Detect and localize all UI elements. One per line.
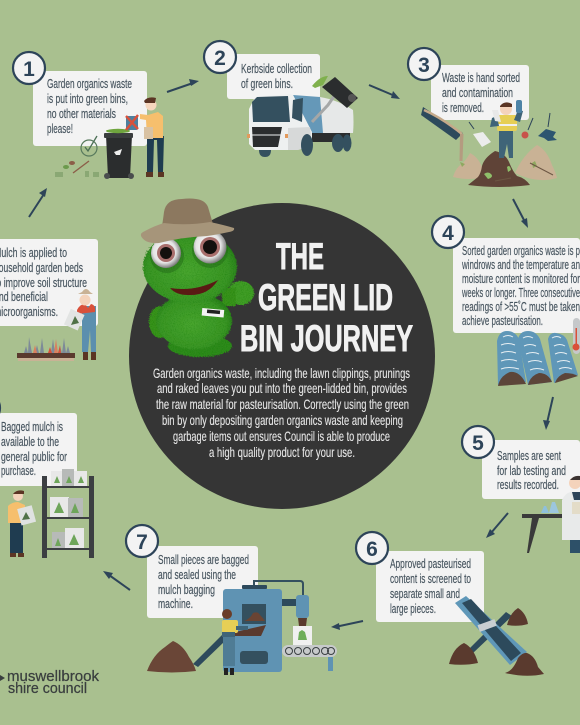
mascot: green character with hat: [141, 198, 254, 357]
panel: step 2: 2: [214, 47, 226, 70]
panel: step 7: 7: [136, 531, 148, 554]
panel: step 4: 4: [442, 222, 454, 245]
panel: step 8: purchase.: [1, 463, 36, 478]
panel: step 6: [356, 532, 544, 676]
panel: step 3: [408, 48, 557, 187]
panel: step 5: [462, 426, 580, 553]
panel: step 6: 6: [366, 538, 378, 561]
panel: step 2: Kerbside collection: [241, 61, 312, 76]
title: GREEN LID: [258, 277, 393, 318]
panel: step 1: 1: [23, 58, 35, 81]
panel: step 7: [126, 525, 337, 675]
icon: garden bed: [17, 337, 75, 361]
panel: step 8: [0, 392, 94, 558]
intro paragraph: a high quality product for your use.: [209, 445, 355, 460]
panel: step 8: general public for: [1, 449, 67, 464]
icon: thermometer: [572, 318, 580, 354]
panel: step 1: please!: [47, 121, 73, 136]
panel: step 7: and sealed using the: [158, 567, 236, 582]
panel: step 7: machine.: [158, 596, 193, 611]
icon: person holding bag: [8, 490, 36, 557]
logo: muswellbrook shire council: [0, 668, 99, 697]
icon: contaminants removed: [469, 113, 557, 147]
panel: step 6: content is screened to: [390, 571, 471, 586]
arrow: [331, 621, 363, 630]
arrow: [543, 397, 553, 430]
panel: step 3: is removed.: [442, 100, 484, 115]
arrow: [167, 79, 199, 92]
icon: piles of screened material: [449, 608, 544, 676]
icon: scientist: [562, 476, 580, 553]
intro paragraph: Garden organics waste, including the lawn clippings, prunings: [153, 366, 410, 381]
logo: muswellbrook shire council: shire council: [8, 680, 87, 697]
central dark circle: [129, 203, 435, 509]
intro paragraph: bin by only depositing garden organics waste and keeping: [162, 413, 403, 428]
icon: compost piles: [453, 145, 557, 187]
title: BIN JOURNEY: [240, 318, 413, 359]
panel: step 6: Approved pasteurised: [390, 556, 471, 571]
intro paragraph: the raw material for pasteurisation. Correctly using the green: [156, 397, 409, 412]
icon: mulch pile and feed conveyor: [147, 635, 225, 672]
icon: lab table and flasks: [522, 502, 580, 553]
title: THE: [276, 236, 324, 277]
panel: step 1: Garden organics waste: [47, 76, 132, 91]
icon: collection truck: [247, 76, 358, 157]
panel: step 3: 3: [418, 54, 430, 77]
panel: step 7: mulch bagging: [158, 582, 215, 597]
logo: muswellbrook shire council: muswellbrook: [7, 668, 99, 685]
icon: farmer with mulch bag: [64, 289, 96, 360]
arrow: [513, 199, 528, 228]
arrow: [369, 85, 400, 99]
panel: step 8: Bagged mulch is: [1, 419, 63, 434]
icon: check mark: [81, 136, 97, 156]
panel: step 7: Small pieces are bagged: [158, 552, 249, 567]
panel: step 8: available to the: [1, 434, 59, 449]
panel: step 9: [0, 239, 98, 361]
panel: step 5: 5: [472, 432, 484, 455]
icon: covered windrows: [497, 331, 578, 386]
panel: step 1: is put into green bins,: [47, 91, 128, 106]
icon: person putting waste in bin: [126, 97, 164, 177]
icon: shelf of mulch bags: [42, 469, 94, 558]
icon: green bin: [104, 129, 134, 179]
arrow: [103, 571, 130, 590]
intro paragraph: garbage items out ensures Council is able to produce: [173, 429, 390, 444]
icon: screening machine: [455, 596, 527, 665]
panel: step 4: [432, 216, 580, 386]
arrow: [486, 513, 508, 538]
panel: step 1: [13, 52, 164, 179]
arrow: [29, 188, 47, 217]
panel: step 2: of green bins.: [241, 76, 293, 91]
panel: step 6: large pieces.: [390, 601, 436, 616]
icon: garden clippings: [55, 161, 99, 177]
panel: step 3: Waste is hand sorted: [442, 70, 520, 85]
icon: worker sorting: [490, 100, 523, 158]
intro paragraph: [153, 366, 410, 460]
panel: step 1: no other materials: [47, 106, 116, 121]
panel: step 6: separate small and: [390, 586, 460, 601]
icon: machine operator: [222, 609, 248, 675]
panel: step 2: [204, 41, 358, 157]
intro paragraph: and raked leaves you put into the green-lidded bin, provides: [157, 381, 407, 396]
title: [240, 236, 413, 359]
panel: step 3: and contamination: [442, 85, 513, 100]
icon: bagging machine: [223, 581, 337, 672]
icon: sorting conveyor: [421, 107, 464, 161]
